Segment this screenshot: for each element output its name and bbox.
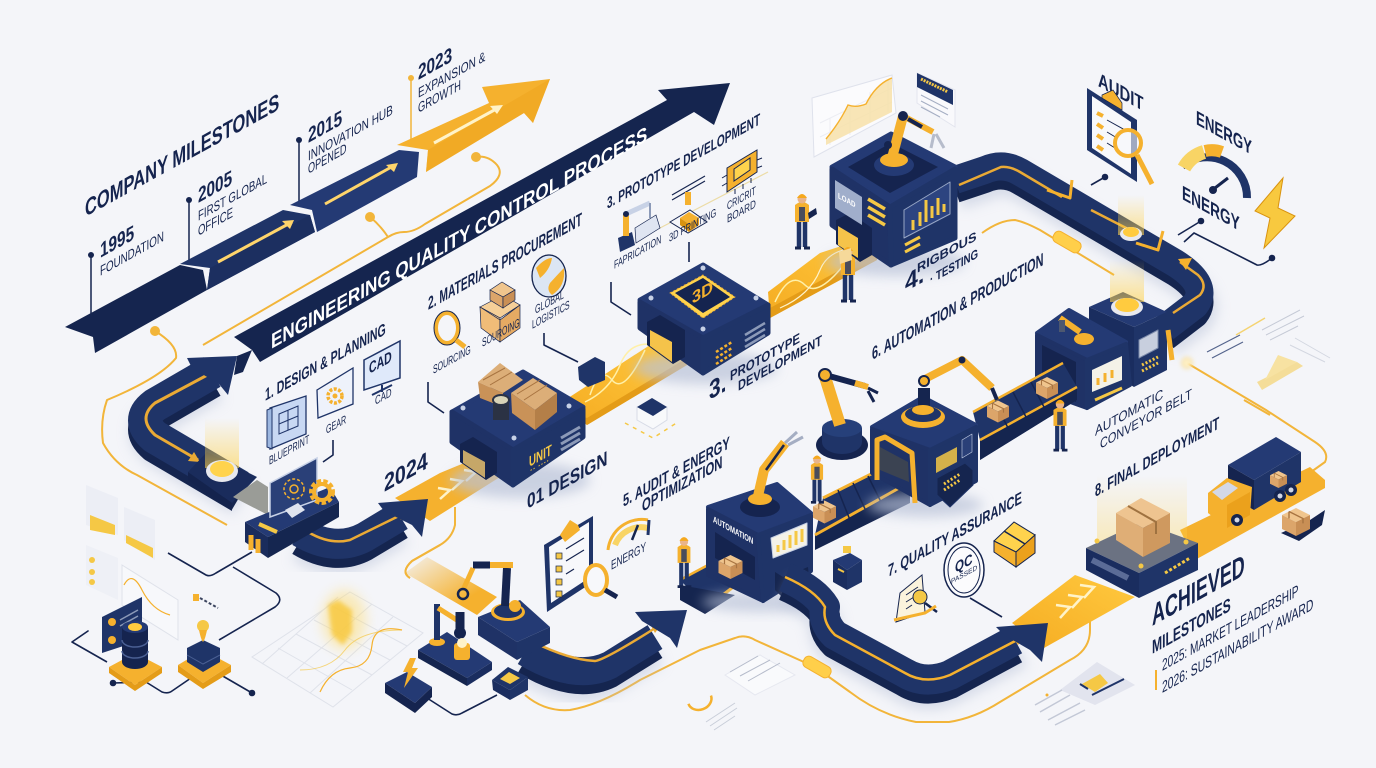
label: souroing: SOUROING [482, 315, 520, 350]
crate under arm [987, 400, 1009, 422]
gold belt: deployment to truck [1180, 467, 1325, 560]
icon: lower audit clipboard [544, 516, 617, 612]
icon: design computer station [245, 458, 339, 558]
wheels [1231, 514, 1243, 526]
robot arm [874, 154, 914, 176]
table arm [429, 638, 445, 646]
monitor [270, 458, 317, 517]
segment 2005 [180, 210, 315, 290]
tunnel box [1037, 310, 1126, 360]
label: 4. rigorous testing [905, 228, 978, 298]
milestones timeline arrow [65, 75, 550, 353]
workers [678, 194, 1067, 587]
step 8 heading: 8. FINAL DEPLOYMENT [1095, 413, 1220, 501]
gold belt: 3D machine to testing [768, 235, 877, 318]
central machine with gold arch [867, 356, 997, 517]
dashboards far left [86, 485, 178, 640]
robot arm: left of central machine [816, 369, 878, 460]
achieved heading: ACHIEVED [1152, 549, 1245, 633]
crates [478, 363, 523, 393]
label: circuit board: BOARD [727, 198, 756, 226]
step 1 heading: 1. DESIGN & PLANNING [265, 319, 386, 405]
conveyor arrow [525, 610, 687, 685]
belt left [680, 557, 753, 607]
report card [917, 73, 955, 127]
small cube node [578, 357, 678, 438]
robot on machine [740, 497, 780, 517]
label: global logistics [532, 287, 570, 332]
chip [670, 275, 735, 318]
conveyor: top right loop [955, 166, 1204, 342]
parcel [1116, 498, 1170, 528]
milestones subheading: MILESTONES [1152, 594, 1231, 659]
icon: gear screen [317, 368, 353, 418]
icon: blueprint [267, 396, 306, 449]
gold pill bottom [801, 654, 833, 680]
work table [418, 632, 492, 678]
milestone 2023: 2023 [418, 43, 452, 85]
label: sourcing: SOURCING [433, 342, 471, 377]
label: 3. prototype development: PROTOTYPE [730, 329, 800, 384]
chart panel above testing machine [812, 75, 896, 157]
step 2 heading: 2. MATERIALS PROCUREMENT [428, 209, 582, 314]
deployment platform with parcel [1086, 475, 1198, 598]
machine 1: unit with crates [450, 345, 690, 498]
milestone 2023: EXPANSION & [418, 47, 486, 101]
title text: ENGINEERING QUALITY CONTROL PROCESS [271, 122, 647, 354]
milestone 2015: INNOVATION HUB [308, 101, 393, 164]
label: automatic conveyor belt: CONVEYOR BELT [1100, 385, 1192, 452]
label: 4. rigorous testing: RIGBOUS [917, 228, 977, 276]
parcel beside truck [1281, 508, 1325, 541]
label: 4. rigorous testing: 4. [905, 259, 924, 298]
machine 5: automation [702, 432, 818, 612]
machine 4: rigorous testing: LOAD [838, 191, 856, 210]
lower tunnel [775, 567, 810, 605]
label: 2024: 2024 [384, 446, 428, 498]
tunnel [715, 532, 755, 580]
arm [491, 603, 525, 621]
machine label: UNIT [529, 441, 552, 471]
label: global logistics: GLOBAL [535, 287, 564, 317]
machine 3: 3D unit [633, 265, 777, 384]
cylinders [122, 627, 148, 669]
label: circuit board [727, 185, 756, 226]
bottom docs left [688, 655, 795, 730]
conveyor: lower left arrow to 2024 [300, 440, 520, 558]
step 3 heading: 3. PROTOTYPE DEVELOPMENT [607, 111, 760, 213]
step 6 heading: 6. AUTOMATION & PRODUCTION [872, 249, 1044, 364]
lightning box [385, 658, 432, 713]
icon: gold box [994, 522, 1035, 567]
icon: QC stamp [944, 543, 984, 597]
milestone 2005 [198, 166, 267, 239]
icon: QA scroll and magnifier [894, 575, 937, 622]
gold arch [880, 447, 909, 482]
display [771, 523, 807, 558]
tunnel [460, 437, 497, 480]
conveyor end block with button [188, 418, 268, 515]
icon: CAD monitor: CAD [369, 348, 392, 378]
milestone 2005: 2005 [198, 166, 232, 208]
bottom docs right [1035, 662, 1135, 725]
belt right [973, 363, 1077, 460]
milestone stems [88, 75, 414, 318]
database panel [102, 597, 162, 691]
achieved milestones block [1152, 549, 1313, 697]
label: energy upper: ENERGY [1196, 107, 1252, 160]
monitor [904, 182, 950, 238]
label: 3. prototype development: 3. [709, 366, 727, 406]
bulb stack [178, 594, 231, 689]
label: 3. prototype development [709, 329, 822, 406]
icon: energy gauge [1182, 150, 1247, 198]
label: AUTOMATION [713, 514, 753, 546]
conveyor: lower centre to quality [785, 577, 1026, 694]
crate at belt start [813, 500, 836, 524]
gear [312, 482, 332, 502]
milestone 2005: OFFICE [198, 204, 233, 239]
milestone 2023: GROWTH [418, 76, 461, 116]
label: gear: GEAR [326, 412, 346, 437]
milestone 1995: FOUNDATION [100, 228, 164, 279]
item 2026: 2026: SUSTAINABILITY AWARD [1162, 596, 1313, 697]
icon: fabrication arm [618, 203, 660, 252]
cab [1208, 478, 1252, 528]
segment 1995 [65, 265, 207, 353]
machine 4: rigorous testing [825, 111, 965, 276]
label: 01 design: 01 DESIGN [527, 447, 608, 514]
label: global logistics: LOGISTICS [532, 297, 570, 332]
gold plate [109, 653, 162, 685]
machines 6: upper right pair [1037, 260, 1172, 408]
label: circuit board: CRICRIT [727, 185, 756, 213]
segment 2023 gold arrow [397, 79, 550, 172]
delivery truck [1208, 437, 1301, 528]
gold connector pill [1051, 229, 1083, 255]
step 5 heading [623, 433, 730, 516]
grid floor with shield [252, 590, 423, 707]
step 5 heading: 5. AUDIT & ENERGY [623, 433, 730, 511]
robot on machine [901, 406, 945, 428]
console [1139, 330, 1158, 358]
icon: CAD monitor [364, 341, 400, 395]
label: fabrication: FAPRICATION [614, 234, 661, 272]
conveyor: upper left loop [145, 350, 252, 499]
panel [835, 180, 862, 225]
tunnel [836, 213, 872, 262]
milestone 1995: 1995 [100, 221, 134, 263]
icon: lightning bolt [1255, 178, 1295, 248]
label: 4. rigorous testing: · TESTING [930, 245, 978, 287]
machine 1: unit with crates: ·· ···· [530, 457, 549, 475]
gold beam [405, 557, 497, 615]
icon: audit clipboard [1087, 88, 1152, 184]
arrow head [378, 499, 428, 537]
icon: QC stamp: QC [955, 550, 973, 577]
item 2025: 2025: MARKET LEADERSHIP [1162, 582, 1298, 675]
milestone 2023 [418, 43, 486, 116]
thin gold connector lines [102, 153, 1326, 722]
label: 3. prototype development: DEVELOPMENT [738, 331, 822, 394]
gold button on top conveyor [1118, 195, 1144, 241]
label: CAD: CAD [375, 385, 392, 408]
segment 2015 [290, 150, 419, 232]
list stem [1155, 670, 1157, 690]
icon: magnifier [434, 311, 465, 347]
gold belt: quality to deployment [1012, 575, 1135, 648]
label: blueprint: BLUEPRINT [269, 431, 310, 468]
worker at panel [1168, 330, 1172, 360]
crate on right belt [1036, 377, 1058, 399]
gold belt out [565, 345, 690, 425]
label: automatic conveyor belt: AUTOMATIC [1095, 385, 1163, 439]
icon: boxes [480, 282, 520, 342]
label: audit: AUDIT [1098, 69, 1144, 116]
milestone 2015 [308, 101, 393, 177]
milestone 2015: 2015 [308, 106, 342, 148]
lower left robot cell [405, 545, 687, 686]
step 7 heading: 7. QUALITY ASSURANCE [888, 488, 1022, 581]
label: 3D printing: 3D PRINTING [669, 207, 716, 245]
small cube [492, 667, 528, 700]
machine 3: 3D unit: 3D [692, 277, 713, 308]
milestone 2015: OPENED [308, 140, 346, 177]
arrow head [187, 356, 237, 395]
milestone 2005: FIRST GLOBAL [198, 170, 267, 224]
icon: 3D printing [670, 176, 707, 233]
gold button box [1089, 292, 1167, 327]
station base [245, 487, 339, 537]
controls [936, 447, 957, 473]
label: lower energy: ENERGY [611, 538, 646, 573]
central conveyor belts [680, 363, 1077, 614]
dark connector lines [72, 174, 1274, 715]
small control cabinet [833, 546, 862, 590]
icon: globe [532, 255, 566, 297]
title: company milestones: COMPANY MILESTONES [85, 88, 279, 223]
gold connector curve [405, 545, 440, 578]
wave glow on belt [585, 344, 655, 402]
glow to gold connector [1182, 358, 1192, 368]
title banner [234, 83, 730, 362]
crates on belts [718, 555, 742, 579]
step 5 heading: OPTIMIZATION [642, 452, 723, 516]
arrow head quality [996, 623, 1048, 662]
cargo [1228, 437, 1301, 480]
icon: QC stamp: PASSED [951, 564, 977, 586]
base [478, 600, 550, 642]
label: energy lower: ENERGY [1182, 182, 1240, 236]
right side docs [1207, 310, 1330, 390]
icon: circuit board [722, 150, 762, 194]
belt centre [815, 463, 910, 535]
icon: lower energy gauge [608, 519, 649, 550]
